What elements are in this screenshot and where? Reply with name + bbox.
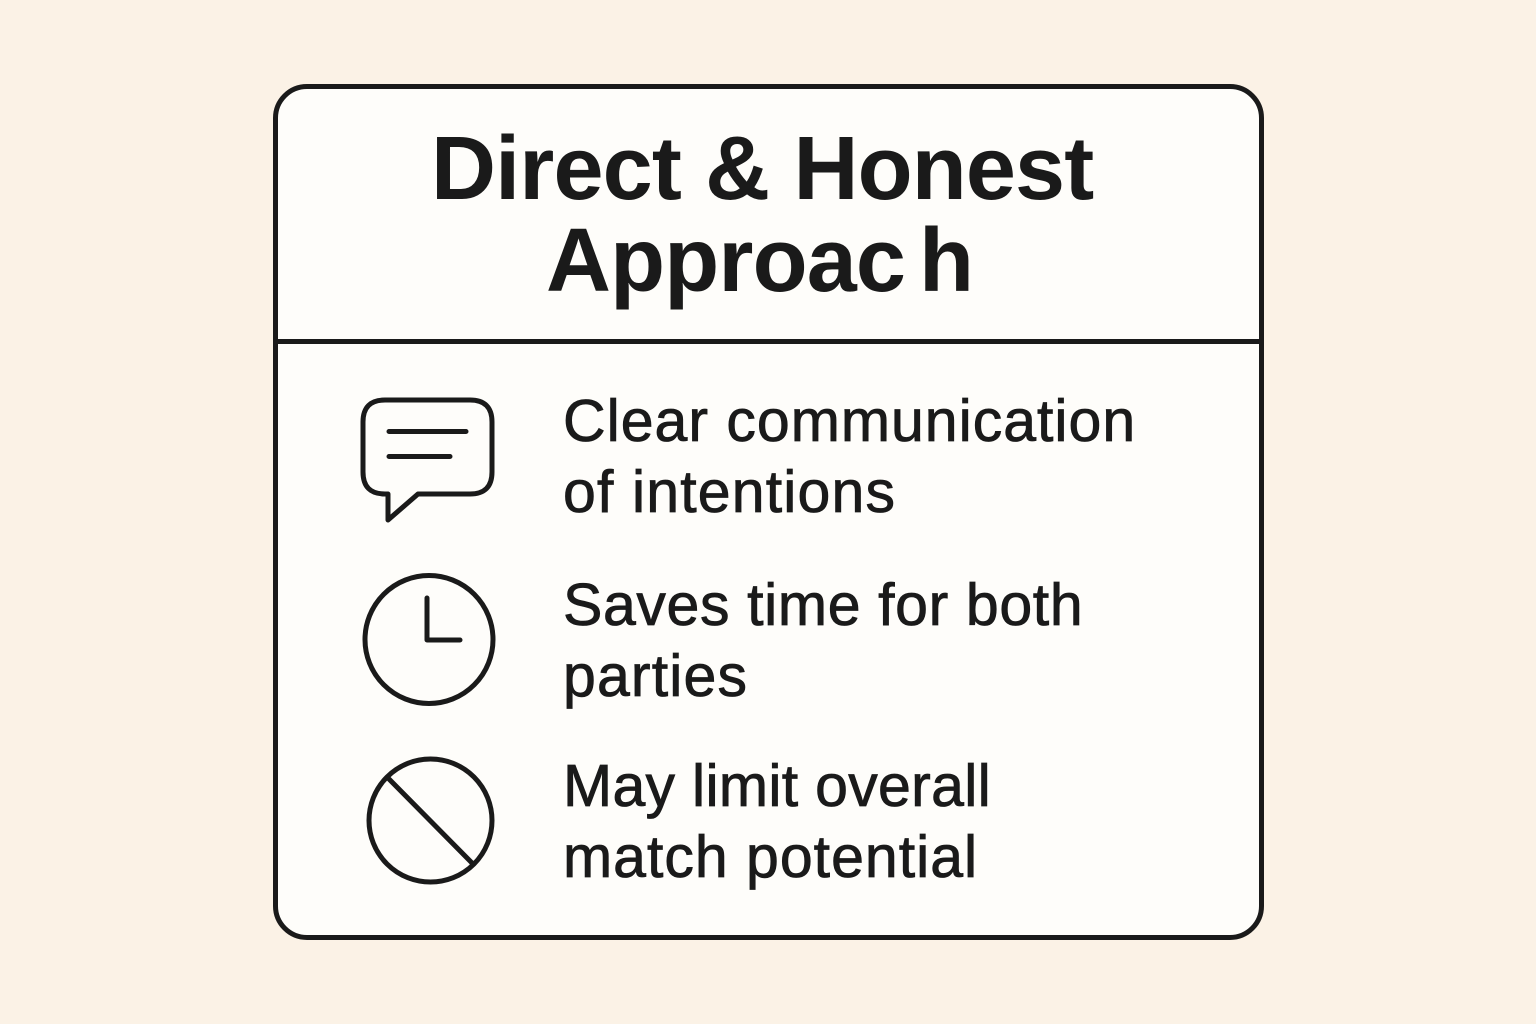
text: saves time — [563, 572, 1083, 709]
text: saves time: Saves time for both — [563, 572, 1083, 638]
text: may limit: May limit overall — [563, 753, 991, 819]
text: clear communication: of intentions — [563, 459, 896, 525]
heading: title: Direct & Honest — [431, 119, 1093, 219]
panel: card — [273, 84, 1264, 940]
icon: clock — [362, 573, 496, 706]
text: may limit — [563, 753, 991, 890]
icon: speech bubble — [360, 398, 494, 522]
icon: prohibited sign — [366, 756, 494, 884]
heading: title: Approach — [546, 211, 973, 311]
text: saves time: parties — [563, 643, 748, 709]
heading: title — [431, 119, 1094, 311]
text: clear communication: Clear communication — [563, 388, 1136, 454]
divider — [277, 339, 1260, 344]
text: clear communication — [563, 388, 1136, 525]
text: may limit: match potential — [563, 824, 978, 890]
